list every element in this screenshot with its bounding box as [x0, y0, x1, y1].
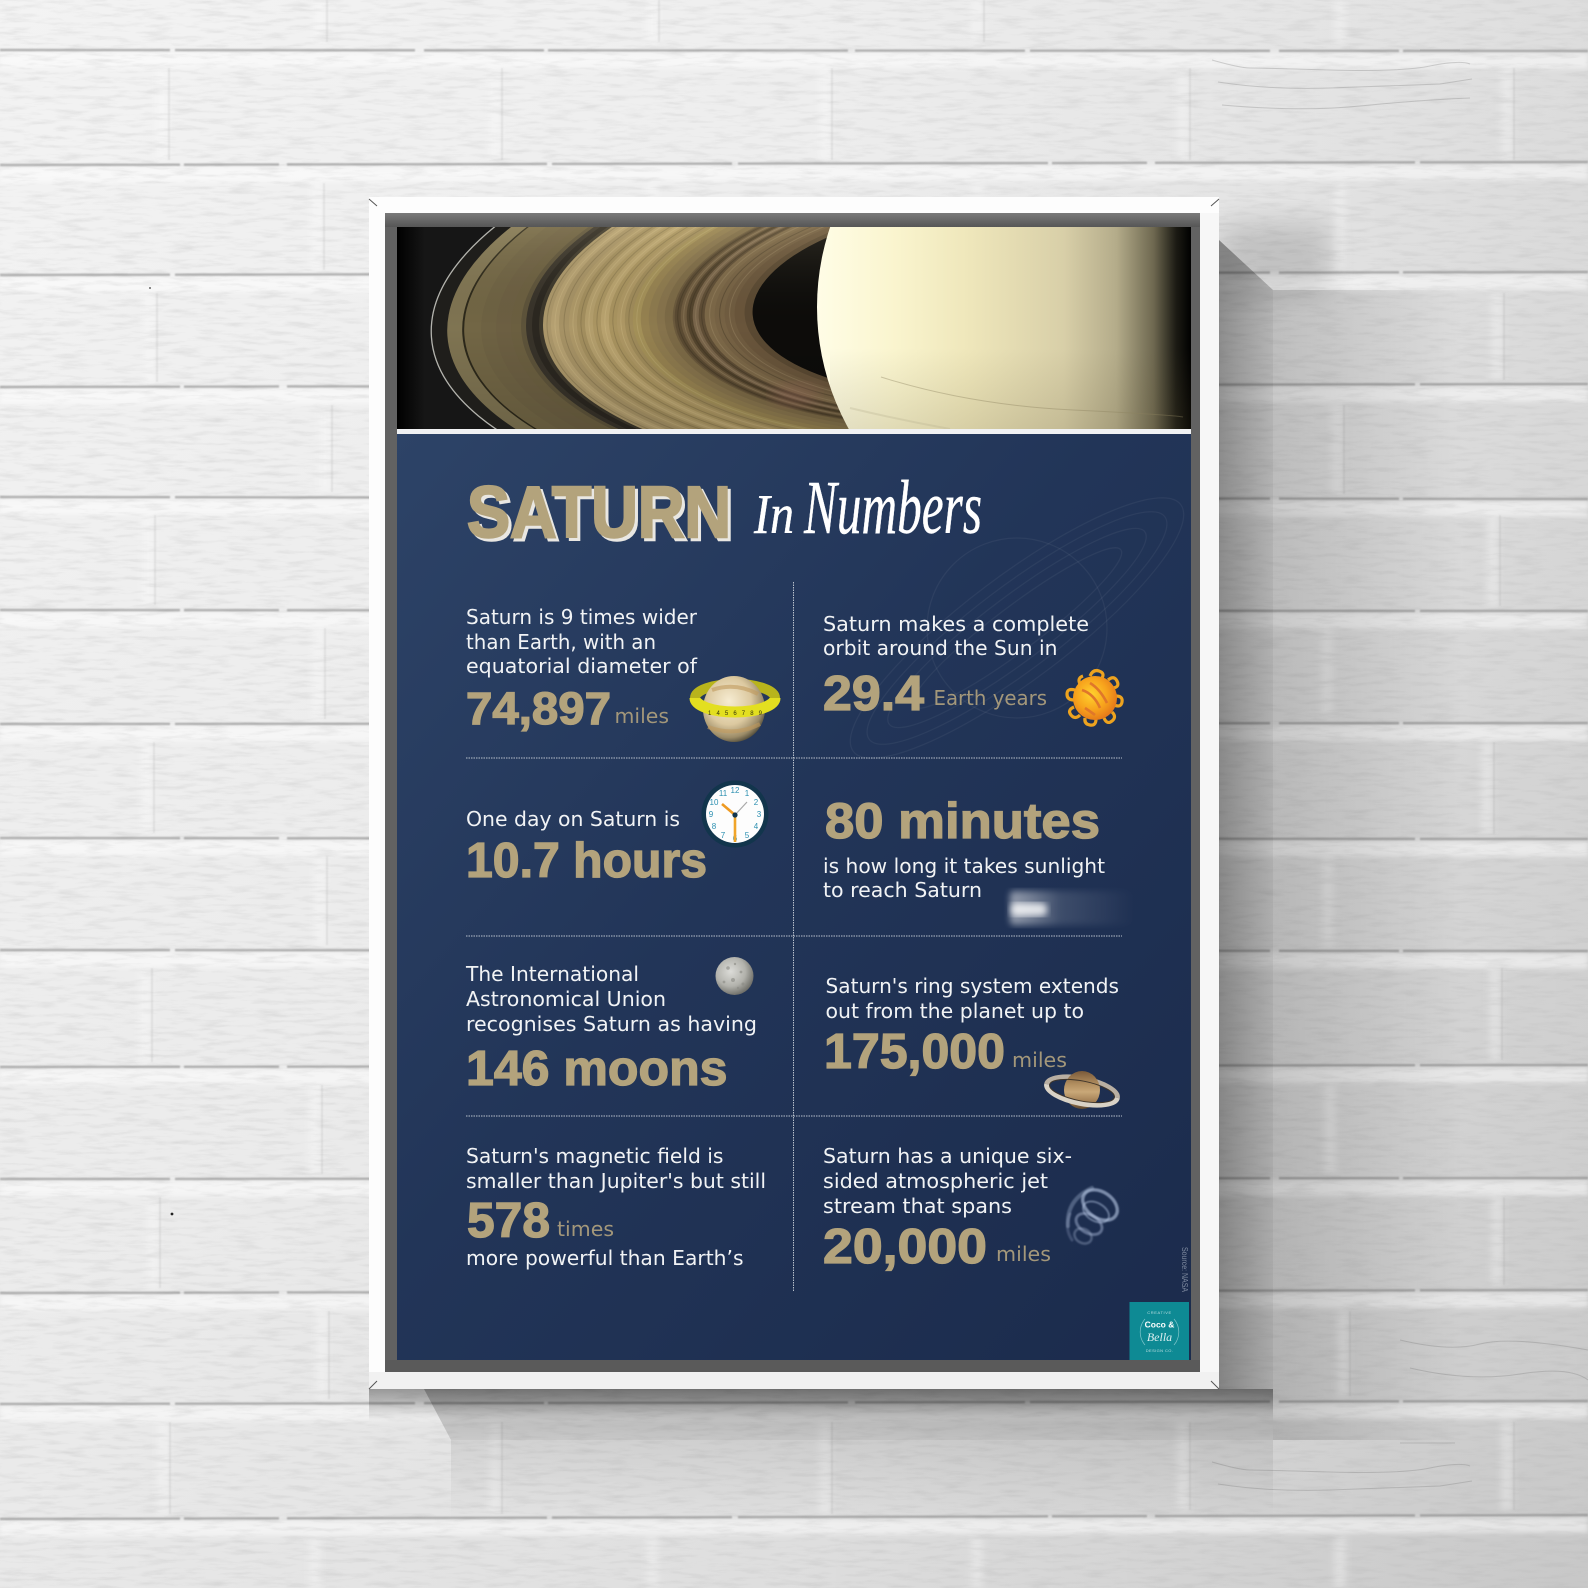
fact: moons: The International: [465, 962, 639, 986]
icon: planet with measuring tape: [695, 676, 775, 742]
fact: moons: Astronomical Union: [466, 987, 666, 1011]
fact: moons: 146 moons: [466, 1042, 728, 1096]
grid dividers: [466, 582, 1122, 1292]
title: SATURN: [467, 473, 731, 553]
logo badge: [1130, 1302, 1189, 1360]
fact: jet stream: miles: [996, 1242, 1051, 1266]
fact: diameter: [466, 605, 698, 734]
icon: clock: 6: [733, 834, 738, 843]
fact: magnetic field: times: [557, 1217, 614, 1241]
fact: diameter: than Earth, with an: [466, 630, 656, 654]
fact: sunlight travel: to reach Saturn: [823, 878, 982, 902]
fact: magnetic field: Saturn's magnetic field is: [466, 1144, 724, 1168]
fact: jet stream: stream that spans: [823, 1194, 1012, 1218]
navy information panel: [397, 434, 1191, 1360]
icon: clock: 11: [719, 789, 728, 798]
fact: jet stream: [823, 1144, 1072, 1274]
fact: magnetic field: [466, 1144, 766, 1270]
fact: jet stream: sided atmospheric jet: [823, 1169, 1048, 1193]
white divider under hero: [397, 429, 1191, 434]
logo badge: Bella: [1147, 1330, 1172, 1344]
fact: ring system: miles: [1012, 1048, 1067, 1072]
fact: ring system: Saturn's ring system extends: [826, 974, 1119, 998]
title: [467, 466, 982, 556]
fact: sunlight travel: 80 minutes: [825, 793, 1100, 849]
title: SATURN: [470, 476, 734, 556]
fact: jet stream: Saturn has a unique six-: [823, 1144, 1072, 1168]
fact: day length: 10.7 hours: [466, 834, 707, 888]
fact: orbit: Earth years: [934, 686, 1047, 710]
planet globe: [817, 227, 1191, 429]
icon: clock: 12: [731, 786, 740, 795]
icon: clock: 10: [710, 798, 719, 807]
fact: moons: recognises Saturn as having: [466, 1012, 757, 1036]
icon: moon: [716, 957, 754, 995]
fact: ring system: out from the planet up to: [826, 999, 1084, 1023]
fact: sunlight travel: is how long it takes sunlight: [823, 854, 1105, 878]
icon: atmospheric vortex: [1067, 1183, 1123, 1247]
logo badge: Coco &: [1145, 1320, 1174, 1330]
fact: orbit: Saturn makes a complete: [823, 612, 1089, 636]
logo badge: CREATIVE: [1147, 1310, 1172, 1315]
fact: ring system: [824, 974, 1119, 1079]
icon: planet with measuring tape: 1 4 5 6 7 8 9: [708, 711, 763, 717]
fact: orbit: 29.4: [823, 667, 924, 721]
fact: orbit: orbit around the Sun in: [823, 636, 1058, 660]
icon: clock: 3: [757, 810, 762, 819]
icon: clock: 5: [745, 831, 750, 840]
fact: moons: [465, 962, 757, 1096]
concentric ring system: [430, 227, 849, 429]
fact: day length: One day on Saturn is: [466, 807, 680, 831]
fact: sunlight travel: [823, 793, 1105, 902]
icon: clock: 8: [712, 822, 717, 831]
fact: magnetic field: more powerful than Earth’s: [466, 1246, 744, 1270]
fact: diameter: Saturn is 9 times wider: [466, 605, 698, 629]
icon: clock: 1: [745, 789, 750, 798]
fact: magnetic field: smaller than Jupiter's but still: [466, 1169, 766, 1193]
watermark: Saturn outline: [822, 463, 1212, 793]
title: Numbers: [803, 466, 982, 550]
frame drop shadow: [369, 222, 1463, 1520]
fact: diameter: 74,897: [466, 683, 611, 734]
icon: beam of sunlight: [1010, 891, 1135, 925]
icon: clock: 2: [754, 798, 759, 807]
logo badge: DESIGN CO.: [1146, 1348, 1173, 1353]
icon: ringed planet: [1044, 1071, 1120, 1110]
fact: orbit: [823, 612, 1089, 721]
fact: ring system: 175,000: [824, 1025, 1005, 1079]
hero photo: Saturn rings and globe: [397, 227, 1191, 429]
white picture frame: [369, 197, 1219, 1389]
title: In: [753, 484, 794, 546]
fine ring striations: [546, 227, 843, 429]
fact: diameter: equatorial diameter of: [466, 654, 698, 678]
icon: sun: [1067, 671, 1122, 725]
source note: Source: NASA: [1180, 1247, 1189, 1293]
icon: clock: [702, 780, 768, 848]
fact: diameter: miles: [614, 704, 669, 728]
icon: clock: 7: [721, 831, 726, 840]
icon: clock: 4: [754, 822, 759, 831]
fact: day length: [466, 807, 707, 888]
icon: clock: 9: [709, 810, 714, 819]
fact: jet stream: 20,000: [823, 1220, 987, 1274]
fact: magnetic field: 578: [467, 1194, 550, 1248]
